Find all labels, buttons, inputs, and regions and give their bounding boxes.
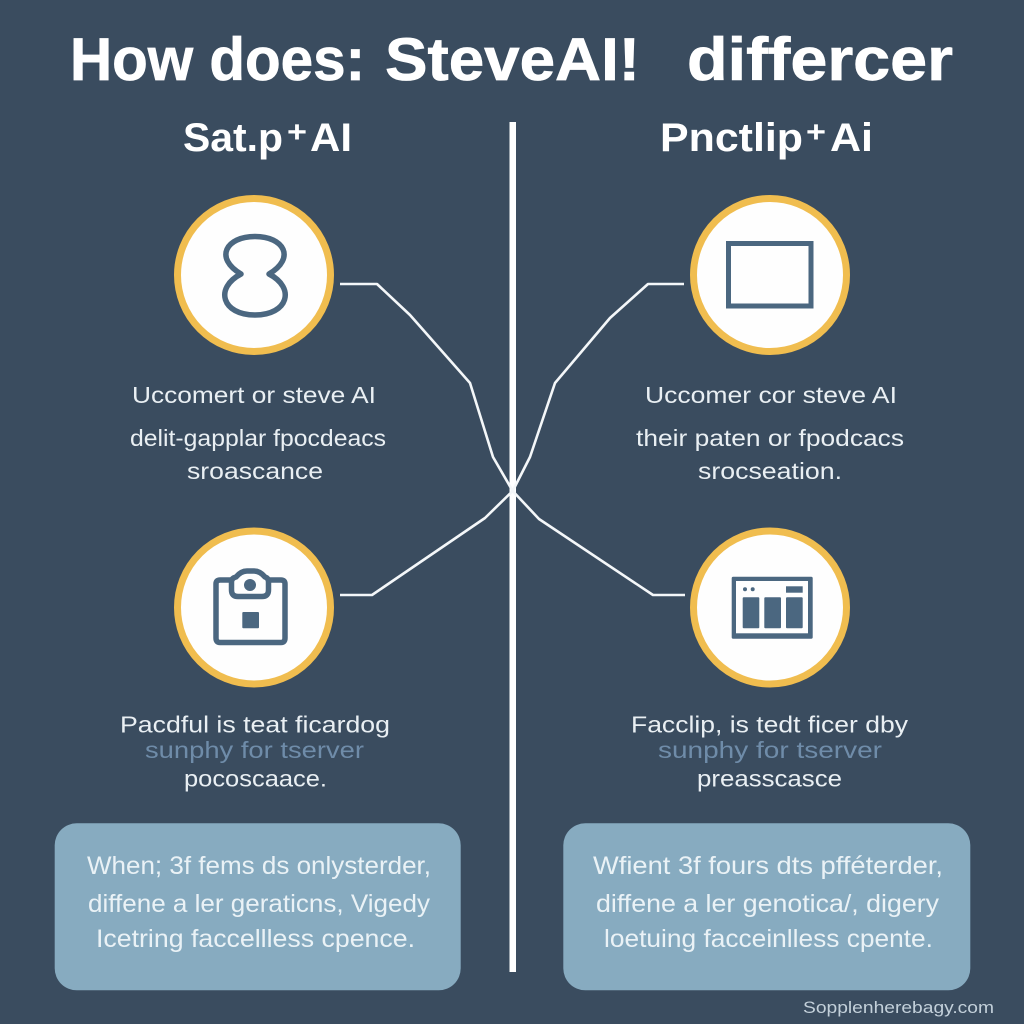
text block: top right description: Uccomer cor steve AI xyxy=(645,382,897,408)
icon: top left loop in circle xyxy=(178,198,330,352)
text block: top left description xyxy=(130,382,386,484)
heading: right column: + xyxy=(806,116,826,149)
text block: top left description: Uccomert or steve AI xyxy=(132,382,376,408)
text block: top left description: sroascance xyxy=(187,458,323,484)
title xyxy=(70,26,953,93)
panel: right summary: Wfient 3f fours dts pfféterder, xyxy=(593,852,943,880)
text block: top right description xyxy=(636,382,904,484)
heading: right column xyxy=(660,116,873,160)
heading: left column: + xyxy=(287,116,307,149)
panel: left summary xyxy=(55,823,461,990)
text block: lower right description: preasscasce xyxy=(697,766,842,792)
text block: lower left description: pocoscaace. xyxy=(184,766,327,792)
panel: left summary: diffene a ler geraticns, Vigedy xyxy=(88,890,431,918)
title: How does: xyxy=(70,26,365,93)
center divider xyxy=(510,122,516,972)
heading: right column: Pnctlip xyxy=(660,116,803,160)
text block: lower left description: Pacdful is teat ficardog xyxy=(120,712,390,738)
text block: lower right description: sunphy for tserver xyxy=(658,737,882,763)
text block: lower left description: sunphy for tserver xyxy=(145,737,364,763)
connector lines xyxy=(340,284,685,595)
icon: lower right window in circle xyxy=(694,531,846,684)
text block: lower right description xyxy=(631,712,908,792)
panel: right summary: diffene a ler genotica/, digery xyxy=(596,890,940,918)
heading: left column xyxy=(183,116,352,160)
heading: right column: Ai xyxy=(830,116,873,160)
text block: top right description: srocseation. xyxy=(698,458,842,484)
footer source: Sopplenherebagy.com xyxy=(803,998,994,1017)
title: differcer xyxy=(687,26,953,93)
icon: lower left camera clipboard in circle xyxy=(178,531,330,684)
text block: top left description: delit-gapplar fpocdeacs xyxy=(130,425,386,451)
text block: lower right description: Facclip, is tedt ficer dby xyxy=(631,712,908,738)
panel: left summary: Icetring faccellless cpence. xyxy=(96,925,415,953)
heading: left column: AI xyxy=(310,116,352,160)
icon: top right rectangle in circle xyxy=(694,198,846,352)
panel: left summary: When; 3f fems ds onlysterder, xyxy=(87,852,431,880)
title: SteveAI! xyxy=(385,26,640,93)
panel: right summary xyxy=(563,823,970,990)
text block: top right description: their paten or fpodcacs xyxy=(636,425,904,451)
heading: left column: Sat.p xyxy=(183,116,283,160)
panel: right summary: loetuing facceinlless cpente. xyxy=(604,925,933,953)
text block: lower left description xyxy=(120,712,390,792)
